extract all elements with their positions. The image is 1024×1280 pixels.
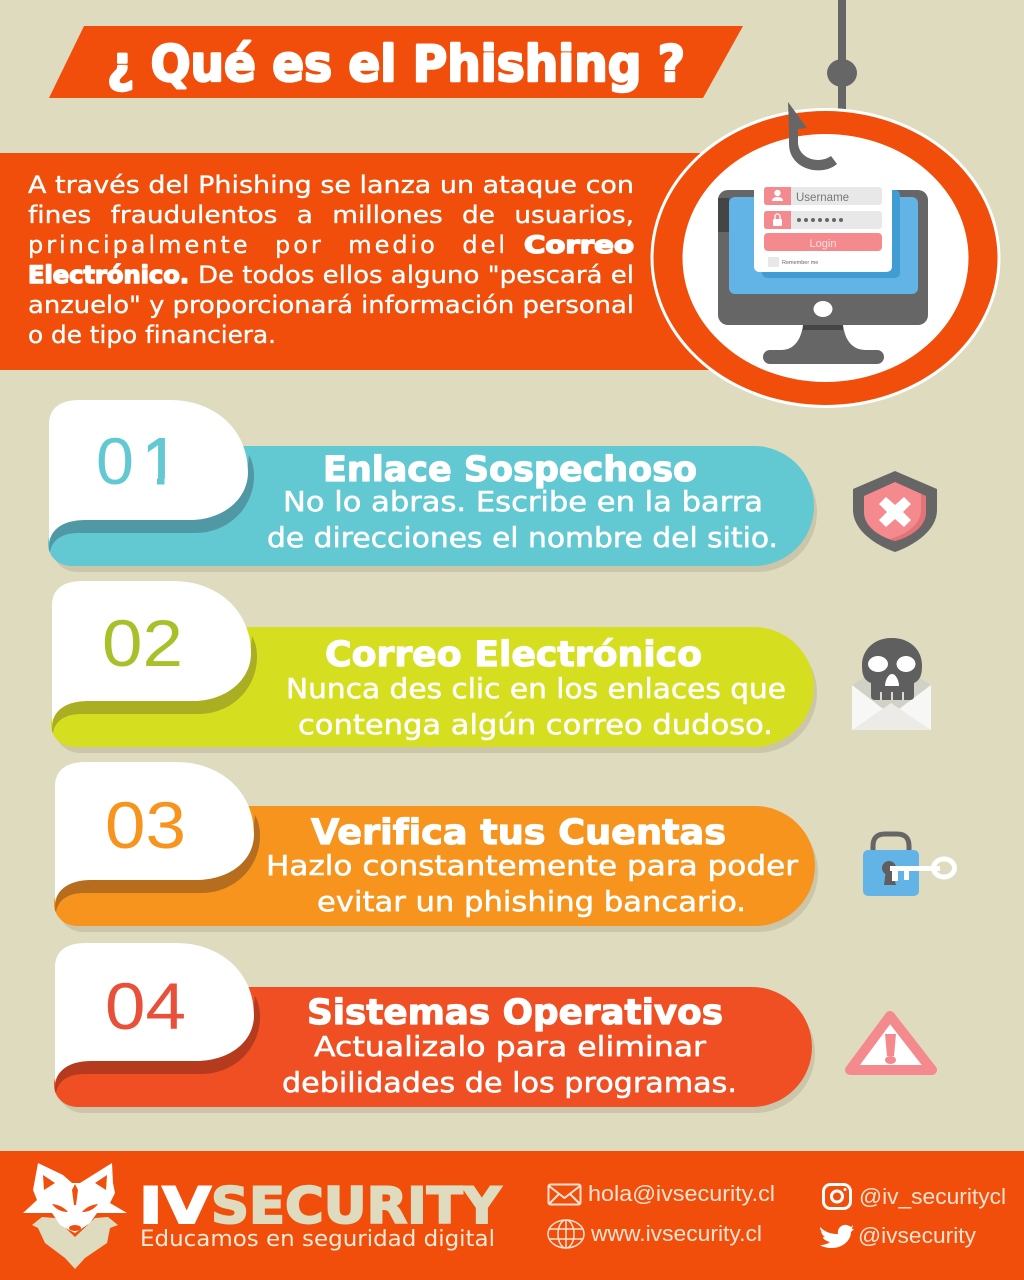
panel: phishing description: [0, 153, 730, 370]
illustration: login monitor in target: Username: [796, 192, 849, 204]
contact: website: www.ivsecurity.cl: [590, 1221, 762, 1246]
panel: phishing description: fines fraudulentos a millones de usuarios,: [28, 201, 634, 229]
panel: phishing description: De todos ellos alguno "pescará el: [198, 261, 634, 289]
panel: step 02: Nunca des clic en los enlaces que: [286, 672, 786, 705]
panel: step 01: [48, 400, 817, 572]
panel: step 03: [54, 762, 818, 932]
panel: step 03: 03: [105, 788, 186, 862]
panel: step 01: de direcciones el nombre del sitio.: [267, 521, 778, 554]
logo wordmark: [139, 1177, 502, 1252]
contact: instagram: @iv_securitycl: [859, 1184, 1006, 1209]
panel: step 03: evitar un phishing bancario.: [317, 885, 746, 918]
panel: step 01: 0: [96, 424, 134, 498]
panel: step 01: No lo abras. Escribe en la barra: [283, 485, 763, 518]
icon: fishing line: [827, 0, 857, 112]
illustration: login monitor in target: [650, 108, 1000, 408]
panel: phishing description: Electrónico.: [28, 261, 189, 289]
icon: warning triangle: [850, 1016, 932, 1070]
panel: step 02: 02: [102, 606, 183, 680]
contact: twitter: @ivsecurity: [858, 1223, 976, 1248]
contact: website: [548, 1220, 762, 1248]
panel: step 04: [54, 943, 815, 1113]
icon: padlock with key: [863, 834, 954, 896]
contact: email: hola@ivsecurity.cl: [588, 1181, 775, 1206]
panel: step 04: Actualizalo para eliminar: [314, 1030, 707, 1063]
footer: [0, 1151, 1024, 1280]
panel: phishing description: A través del Phishing se lanza un ataque con: [28, 171, 634, 199]
panel: step 02: contenga algún correo dudoso.: [298, 708, 773, 741]
panel: step 04: 04: [105, 969, 186, 1043]
panel: step 01: Enlace Sospechoso: [323, 450, 697, 490]
panel: phishing description: Correo: [524, 231, 634, 259]
panel: step 03: Verifica tus Cuentas: [311, 813, 726, 853]
panel: phishing description: anzuelo" y proporcionará información personal: [28, 291, 634, 319]
icon: skull in envelope: [852, 638, 931, 730]
panel: step 04: Sistemas Operativos: [307, 993, 723, 1033]
icon: fish hook: [788, 102, 837, 170]
logo wordmark: Educamos en seguridad digital: [140, 1227, 495, 1252]
panel: step 02: Correo Electrónico: [325, 635, 702, 675]
panel: step 01: 1: [142, 424, 179, 498]
panel: step 04: debilidades de los programas.: [282, 1066, 737, 1099]
illustration: login monitor in target: Login: [810, 238, 836, 250]
logo wordmark: SECURITY: [211, 1177, 502, 1235]
logo: fox: [23, 1163, 127, 1269]
panel: phishing description: o de tipo financiera.: [28, 321, 276, 349]
panel: step 02: [51, 581, 817, 753]
panel: step 03: Hazlo constantemente para poder: [266, 849, 799, 882]
icon: shield with x: [853, 471, 937, 552]
illustration: login monitor in target: Remember me: [782, 260, 818, 266]
panel: phishing description: principalmente por medio del: [28, 231, 505, 259]
title banner: ¿ Qué es el Phishing ?: [107, 35, 685, 93]
logo wordmark: IV: [139, 1177, 211, 1235]
